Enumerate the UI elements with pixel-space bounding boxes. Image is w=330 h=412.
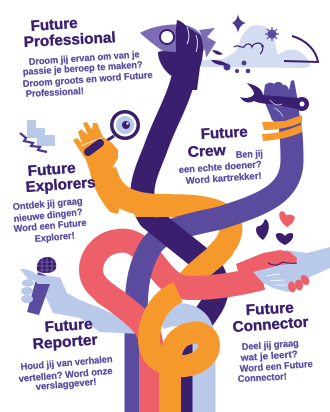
text: Future Reporter body	[18, 354, 113, 393]
icon: microphone	[27, 257, 56, 315]
text: Future Connector body	[238, 338, 313, 385]
light blue arm	[45, 277, 204, 412]
orange arm loop	[149, 292, 209, 412]
text: Future Professional body: passie je beroep te maken?	[23, 60, 143, 78]
heading: Future Reporter: Future	[44, 316, 93, 336]
red lower loop strand	[103, 292, 151, 412]
dark purple arm	[142, 66, 217, 412]
dark arm crossing over purple	[155, 222, 205, 262]
light blue right hand	[253, 247, 330, 292]
text: Future Connector body: Word een Future	[239, 359, 313, 375]
heading: Future Crew: Future	[200, 124, 248, 143]
text: Future Professional body: Professional!	[26, 86, 84, 100]
orange band over dark crossing	[135, 194, 172, 217]
icon: rocket	[140, 24, 228, 65]
text: Future Explorers body	[12, 196, 87, 245]
heading: Future Reporter: Reporter	[32, 331, 98, 353]
heading: Future Professional: Future	[30, 15, 78, 35]
heading: Future Professional	[23, 15, 116, 51]
heading: Future Crew	[187, 124, 248, 161]
heading: Future Explorers: Future	[27, 160, 76, 180]
dark purple hand	[158, 20, 203, 90]
red hand	[236, 250, 311, 293]
icon: cloud squiggle	[234, 43, 263, 54]
light blue fingers holding microphone	[20, 269, 58, 303]
icon: spiky sun	[265, 27, 279, 41]
orange hand	[73, 122, 122, 214]
orange limb over dark crossing	[187, 247, 224, 283]
text: Future Explorers body: Ontdek jij graag	[12, 196, 83, 213]
text: Future Connector body: wat je leert?	[239, 349, 298, 364]
text: Future Explorers body: Explorer!	[34, 231, 75, 245]
red arm	[91, 241, 262, 412]
text: Future Crew body: Ben jij	[236, 149, 263, 161]
heading: Future Reporter	[32, 316, 98, 353]
text: Future Explorers body: Word een Future	[13, 218, 87, 235]
heading: Future Connector: Future	[245, 300, 294, 319]
heading: Future Professional: Professional	[23, 29, 116, 51]
text: Future Crew body: een echte doener?	[178, 159, 262, 176]
orange arm upper	[105, 170, 231, 283]
icon: arc and line	[284, 36, 318, 62]
icon: star	[232, 14, 246, 33]
text: Future Explorers body: nieuwe dingen?	[13, 207, 83, 225]
text: Future Professional body: Droom groots en word Future	[22, 70, 153, 90]
text: Future Connector body: Connector!	[238, 371, 287, 385]
text: Future Crew body	[178, 149, 263, 187]
heading: Future Explorers: Explorers	[25, 174, 96, 196]
heading: Future Connector	[232, 300, 309, 336]
heading: Future Connector: Connector	[232, 314, 309, 336]
heading: Future Explorers	[25, 160, 96, 196]
purple arm	[136, 118, 292, 412]
text: Future Reporter body: Houd jij van verhalen	[20, 354, 113, 373]
text: Future Crew body: Word kartrekker!	[185, 171, 262, 187]
purple hand with wrench	[240, 80, 309, 124]
zigzag decoration	[20, 120, 55, 152]
text: Future Reporter body: vertellen? Word onze	[18, 366, 113, 385]
text: Future Professional body: Droom jij ervan om van je	[28, 49, 140, 68]
text: Future Professional body	[22, 49, 153, 100]
magnifier handle in hand	[88, 143, 100, 152]
icon: dots	[224, 61, 250, 73]
red strand over orange	[163, 274, 262, 288]
text: Future Reporter body: verslaggever!	[35, 377, 97, 393]
hearts	[256, 211, 295, 245]
icon: cloud	[200, 25, 311, 68]
text: Future Connector body: Deel jij graag	[241, 338, 299, 353]
heading: Future Crew: Crew	[187, 142, 226, 161]
icon: magnifying glass	[103, 110, 140, 143]
orange measuring tape	[262, 115, 302, 141]
